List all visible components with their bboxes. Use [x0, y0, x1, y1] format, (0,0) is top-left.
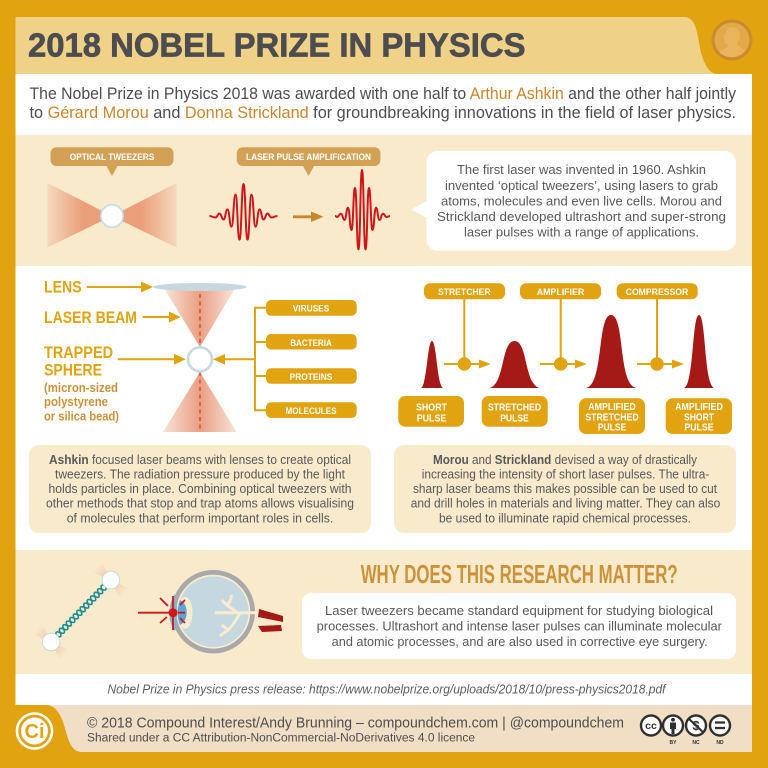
label: amplified stretched pulse: PULSE [598, 422, 626, 434]
optic nerve [258, 609, 283, 632]
panel: Morou and Strickland text: increasing the intensity of short laser pulses. The ultra- [422, 468, 709, 482]
callout: why it matters text: and atomic processes, and are also used in corrective eye surgery. [332, 635, 708, 649]
label: viruses: VIRUSES [293, 304, 329, 314]
panel: Ashkin text: holds particles in place. Combining optical tweezers with [48, 482, 352, 496]
panel: Morou and Strickland text: and drill holes in materials and living matter. They can also [411, 496, 720, 510]
eyeball [174, 572, 253, 651]
pulse: stretched [490, 341, 540, 388]
icon: optical tweezers bow tie [48, 183, 176, 248]
panel: Ashkin text [29, 445, 371, 533]
title banner [16, 17, 718, 74]
icon: Creative Commons licence badges: $ [692, 718, 700, 733]
label: compressor: COMPRESSOR [626, 287, 689, 297]
callout: why it matters text: processes. Ultrashort and intense laser pulses can illuminate molecular [317, 620, 722, 634]
title: 2018 NOBEL PRIZE IN PHYSICS [28, 27, 526, 64]
label: laser pulse amplification: LASER PULSE AMPLIFICATION [246, 152, 371, 162]
credit line: © 2018 Compound Interest/Andy Brunning – compoundchem.com | @compoundchem [87, 714, 624, 732]
panel: Morou and Strickland text: be used to illuminate rapid chemical processes. [439, 512, 691, 526]
label: compressor [617, 283, 698, 299]
label: amplified short pulse [666, 398, 732, 434]
laser [138, 596, 185, 630]
label: trapped sphere: polystyrene [44, 395, 108, 409]
arrow: wave amplification [293, 212, 324, 222]
cornea [169, 594, 177, 631]
panel: Ashkin text: Ashkin focused laser beams with lenses to create optical [49, 453, 351, 467]
pulse: short [421, 341, 443, 388]
diagram: chirped pulse amplification [421, 299, 714, 388]
connector lines [464, 299, 657, 364]
label: amplifier [520, 283, 601, 299]
callout: why it matters text: Laser tweezers became standard equipment for studying biological [325, 604, 713, 618]
arrow: compressor step [637, 357, 684, 371]
icon: Nobel medal [712, 20, 752, 60]
label: molecules: MOLECULES [286, 406, 336, 416]
lens [178, 597, 192, 629]
icon: Creative Commons licence badges: BY [670, 740, 677, 746]
panel: press release source [16, 674, 752, 705]
icon: Creative Commons licence badges [641, 716, 730, 746]
arrow head: particles to sphere [213, 354, 225, 365]
arrow: amplifier step [540, 357, 587, 371]
icon: Creative Commons licence badges: cc [645, 720, 657, 732]
label: stretcher: STRETCHER [438, 287, 491, 297]
panel: Ashkin text: tweezers. The radiation pressure produced by the light [55, 468, 345, 482]
label: stretched pulse: STRETCHED [488, 401, 541, 413]
panel: Morou and Strickland text: Morou and Strickland devised a way of drastically [433, 453, 698, 467]
label: proteins: PROTEINS [290, 372, 332, 382]
callout: history of the laser: The first laser was invented in 1960. Ashkin [457, 163, 706, 177]
label: amplified short pulse: SHORT [684, 411, 714, 423]
panel: footer credits [46, 705, 752, 752]
label: trapped sphere: SPHERE [44, 361, 102, 380]
label: trapped sphere: or silica bead) [44, 410, 119, 424]
iris [178, 600, 187, 625]
label: trapped sphere: (micron-sized [44, 381, 118, 395]
label: amplified stretched pulse [579, 398, 645, 434]
arrow: stretcher step [444, 357, 491, 371]
lens [153, 283, 247, 291]
panel: white diagrams area [16, 266, 752, 550]
label: viruses [266, 300, 357, 316]
lower laser cone [163, 372, 236, 432]
label: bacteria: BACTERIA [290, 338, 332, 348]
panel: introduction [16, 74, 752, 135]
label: amplified stretched pulse: AMPLIFIED [588, 401, 636, 413]
bracket arrow: particles to sphere [222, 308, 266, 410]
label: short pulse: SHORT [416, 401, 447, 413]
panel: Ashkin text: of molecules that perform important roles in cells. [67, 512, 333, 526]
panel: press release source: Nobel Prize in Physics press release: https://www.nobelprize.org/uploads/2018/10/press-physics2018.pdf [108, 682, 667, 696]
licence line: Shared under a CC Attribution-NonCommercial-NoDerivatives 4.0 licence [87, 732, 475, 744]
callout: history of the laser [411, 151, 736, 251]
icon: Creative Commons licence badges: ND [716, 740, 724, 746]
label: short pulse [398, 396, 464, 427]
label: trapped sphere [44, 343, 186, 424]
icon: Compound Interest logo: Ci [24, 721, 44, 743]
panel: Ashkin text: other methods that stop and trap atoms allows visualising [46, 496, 354, 510]
label: short pulse: PULSE [417, 413, 446, 425]
label: amplified stretched pulse: STRETCHED [585, 411, 639, 423]
beam axis [199, 294, 201, 432]
panel: overview band [16, 135, 752, 266]
label: laser beam: LASER BEAM [44, 308, 137, 327]
label: amplifier: AMPLIFIER [537, 287, 585, 297]
icon: amplified laser wave [335, 170, 390, 249]
trapped sphere [188, 347, 212, 371]
intro line 1: The Nobel Prize in Physics 2018 was awarded with one half to Arthur Ashkin and the other half jointly [30, 84, 736, 103]
icon: DNA held by optical tweezers [31, 561, 131, 661]
intro line 2: to Gérard Morou and Donna Strickland for groundbreaking innovations in the field of laser physics. [30, 103, 736, 122]
retina vessels [215, 595, 256, 636]
label: optical tweezers: OPTICAL TWEEZERS [70, 152, 154, 162]
label: trapped sphere: TRAPPED [44, 343, 113, 362]
label: stretched pulse: PULSE [500, 413, 529, 425]
callout: history of the laser: invented ‘optical tweezers’, using lasers to grab [445, 179, 718, 193]
panel: why it matters band [16, 550, 752, 674]
callout: history of the laser: Strickland developed ultrashort and super-strong [437, 210, 726, 224]
label: amplified short pulse: PULSE [684, 422, 714, 434]
icon: Creative Commons licence badges: NC [692, 740, 700, 746]
icon: short laser wave [210, 184, 278, 240]
label: lens [44, 278, 153, 297]
callout: history of the laser: atoms, molecules and even live cells. Morou and [441, 194, 722, 208]
label: lens: LENS [44, 278, 82, 297]
label: molecules [266, 402, 357, 418]
label: bacteria [266, 334, 357, 350]
callout: why it matters text [302, 593, 736, 659]
callout: history of the laser: laser pulses with a range of applications. [464, 226, 699, 240]
upper laser cone [165, 290, 234, 347]
pulse: amplified stretched [586, 315, 636, 388]
panel: Morou and Strickland text: sharp laser beams this makes possible can be used to cut [413, 482, 717, 496]
label: amplified short pulse: AMPLIFIED [675, 401, 723, 413]
diagram: optical tweezers [153, 283, 247, 432]
icon: Compound Interest logo [17, 714, 52, 748]
label: stretcher [424, 283, 505, 299]
panel: Morou and Strickland text [394, 445, 736, 533]
label: stretched pulse [482, 396, 548, 427]
pulse: amplified short [684, 315, 714, 388]
label: optical tweezers [50, 147, 174, 176]
icon: eye with laser surgery [138, 572, 283, 651]
label: laser pulse amplification [237, 147, 380, 176]
label: proteins [266, 368, 357, 384]
